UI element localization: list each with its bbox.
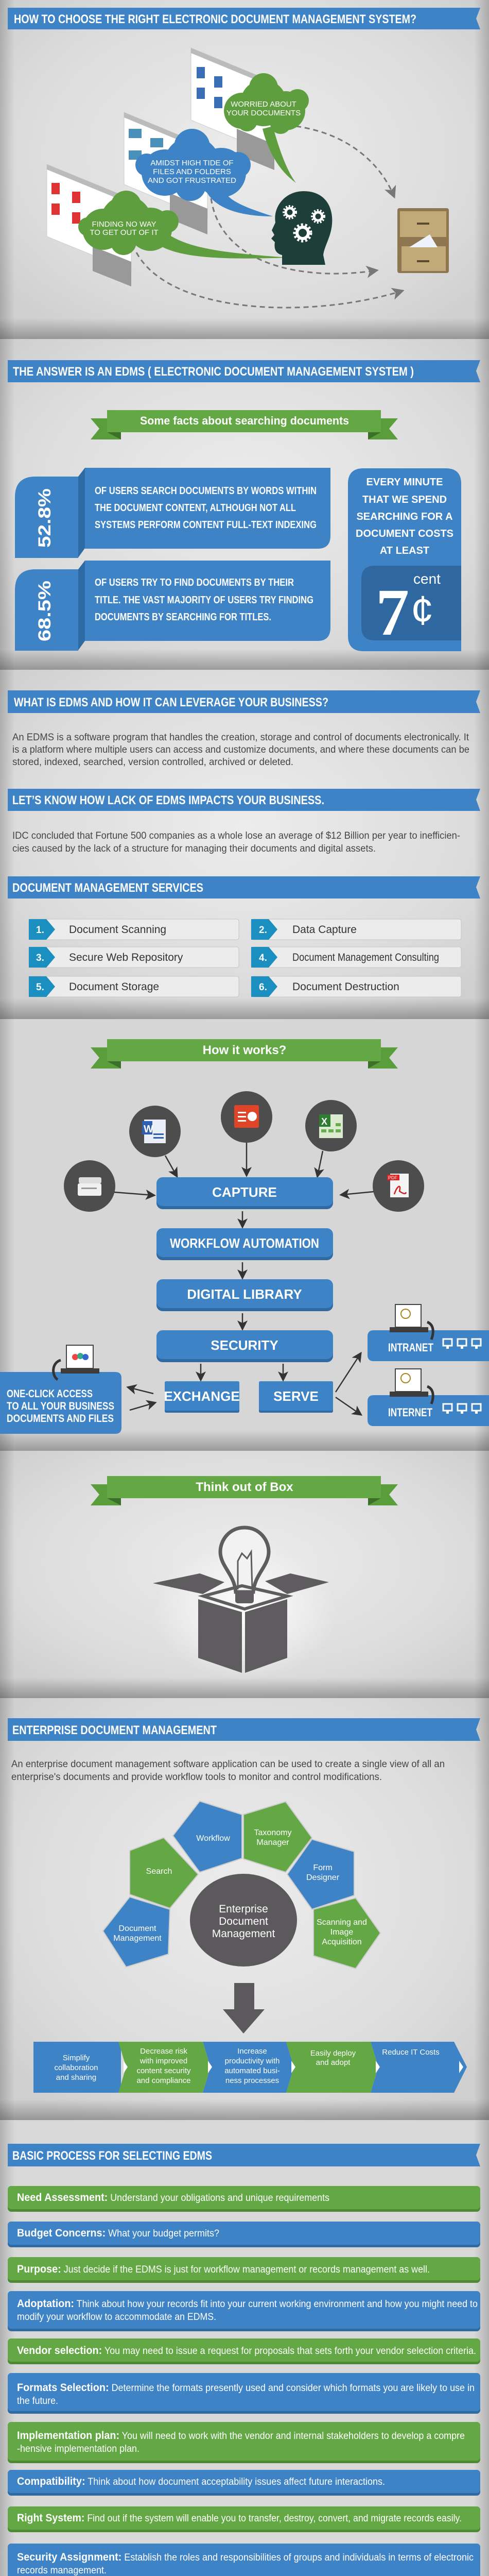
box: serve: SERVE — [273, 1388, 319, 1404]
process rows: Right System: Find out if the system will enable you to transfer, destroy, convert, and migrate records easily. — [17, 2512, 462, 2524]
cloud: worried — [224, 73, 309, 183]
ribbon: some facts — [91, 410, 398, 439]
box: one-click access: ONE-CLICK ACCESS — [7, 1388, 93, 1400]
icon: bulb in box — [152, 1528, 337, 1680]
dashed arrows to cabinet — [136, 126, 401, 308]
box: digital library — [156, 1279, 333, 1311]
diagram: EDM pentagons: Designer — [306, 1873, 340, 1882]
banner: lack of edms — [8, 789, 480, 811]
stat: 7 cent: THAT WE SPEND — [362, 494, 447, 505]
box: exchange — [164, 1381, 240, 1413]
text: idc: IDC concluded that Fortune 500 companies as a whole lose an average of $12 Billion per year to inefficien- — [12, 831, 460, 841]
banner: what is edms: WHAT IS EDMS AND HOW IT CAN LEVERAGE YOUR BUSINESS? — [14, 696, 328, 709]
text: edms definition: stored, indexed, searched, version controlled, archived or deleted. — [12, 757, 293, 768]
cloud: finding: TO GET OUT OF IT — [90, 228, 159, 237]
services list: Data Capture — [292, 924, 357, 936]
process rows: Need Assessment: Understand your obligations and unique requirements — [17, 2192, 329, 2204]
services list: 5. — [36, 982, 44, 993]
diagram: EDM pentagons: Scanning and — [317, 1918, 367, 1927]
banner: enterprise document management: ENTERPRISE DOCUMENT MANAGEMENT — [12, 1723, 217, 1737]
stat: 68.5%: DOCUMENTS BY SEARCHING FOR TITLES. — [95, 612, 271, 623]
banner: services — [8, 876, 480, 899]
text: enterprise: An enterprise document management software application can be used to create a single view of all an — [11, 1759, 445, 1770]
services list: Document Management Consulting — [292, 952, 439, 963]
benefits bar: Increase — [237, 2047, 267, 2056]
ribbon: how it works: How it works? — [203, 1043, 286, 1057]
benefits bar: Easily deploy — [310, 2049, 356, 2058]
services list: 1. — [36, 925, 44, 936]
cloud: amidst — [135, 129, 273, 216]
diagram: EDM pentagons: Enterprise — [219, 1903, 268, 1915]
box: one-click access: DOCUMENTS AND FILES — [7, 1413, 114, 1425]
process rows: Formats Selection: Determine the formats presently used and consider which formats you are likely to use in — [17, 2382, 475, 2394]
services list: 3. — [36, 953, 44, 963]
cloud: finding — [78, 191, 288, 259]
icon circles: sources: PDF — [388, 1175, 398, 1180]
box: capture: CAPTURE — [212, 1184, 277, 1200]
benefits bar: Simplify — [63, 2054, 90, 2062]
cloud: finding: FINDING NO WAY — [92, 220, 156, 229]
benefits bar: content security — [136, 2066, 191, 2075]
process rows: Security Assignment: Establish the roles and responsibilities of groups and individuals in terms of electronic — [17, 2551, 474, 2563]
banner: basic process — [8, 2144, 480, 2166]
banner: the answer: THE ANSWER IS AN EDMS ( ELECTRONIC DOCUMENT MANAGEMENT SYSTEM ) — [13, 365, 414, 379]
diagram: EDM pentagons: Management — [113, 1934, 162, 1943]
browser windows — [47, 48, 274, 286]
stat: 7 cent: SEARCHING FOR A — [356, 511, 453, 522]
services list: Document Storage — [69, 981, 159, 993]
process rows: Implementation plan: You will need to work with the vendor and internal stakeholders to develop a compre — [17, 2430, 465, 2442]
box: workflow automation: WORKFLOW AUTOMATION — [170, 1235, 319, 1251]
process rows: -hensive implementation plan. — [17, 2444, 139, 2454]
text: enterprise — [11, 1759, 445, 1783]
icon circles: sources: W — [144, 1124, 153, 1135]
box: internet: INTERNET — [388, 1406, 432, 1419]
services list: 4. — [259, 953, 267, 963]
diagram: EDM pentagons: Document — [219, 1916, 268, 1927]
stat: 52.8%: 52.8% — [35, 488, 55, 548]
icon: laptop one-click — [54, 1345, 99, 1380]
icon circles: sources — [64, 1091, 424, 1212]
box: one-click access: TO ALL YOUR BUSINESS — [7, 1400, 114, 1412]
icon: head with gears — [271, 191, 332, 265]
diagram: EDM pentagons: Manager — [256, 1838, 289, 1847]
stat: 52.8%: THE DOCUMENT CONTENT, ALTHOUGH NOT ALL — [95, 502, 296, 514]
services list: 2. — [259, 925, 267, 936]
benefits bar: automated busi- — [224, 2066, 280, 2075]
box: security — [156, 1330, 333, 1362]
stat: 7 cent: EVERY MINUTE — [366, 477, 443, 488]
diagram: EDM pentagons: Document — [119, 1924, 156, 1933]
stat: 68.5%: 68.5% — [35, 581, 55, 641]
icon: filing cabinet — [397, 208, 449, 273]
stat: 7 cent — [348, 468, 461, 651]
benefits bar: and compliance — [136, 2076, 191, 2085]
icon circles: sources: X — [321, 1116, 327, 1127]
text: edms definition: An EDMS is a software program that handles the creation, storage and control of documents electronically. It — [12, 732, 469, 743]
services list: Document Scanning — [69, 924, 166, 936]
benefits bar: with improved — [139, 2057, 187, 2065]
services list: Document Destruction — [292, 981, 399, 993]
banner: how to choose — [8, 8, 480, 29]
cloud: amidst: AMIDST HIGH TIDE OF — [150, 159, 234, 167]
benefits bar — [33, 2042, 467, 2093]
icon: laptop internet — [390, 1369, 433, 1404]
process rows: Budget Concerns: What your budget permits? — [17, 2227, 219, 2239]
benefits bar: ness processes — [225, 2076, 279, 2085]
box: intranet — [368, 1330, 489, 1361]
diagram: EDM pentagons: Workflow — [196, 1834, 230, 1843]
benefits bar: and adopt — [316, 2058, 351, 2067]
process rows: records management. — [17, 2565, 107, 2576]
box: capture — [156, 1177, 333, 1209]
benefits bar: productivity with — [225, 2057, 280, 2065]
diagram: EDM pentagons: Form — [313, 1863, 333, 1872]
cloud: amidst: FILES AND FOLDERS — [153, 167, 231, 176]
text: edms definition: is a platform where multiple users can access and customize documents, and where these documents can be — [12, 744, 469, 755]
stat: 68.5% — [15, 561, 330, 651]
banner: enterprise document management — [8, 1718, 480, 1741]
process rows: Compatibility: Think about how document acceptability issues affect future interactions. — [17, 2476, 385, 2487]
process rows: Adoptation: Think about how your records fit into your current working environment and how you might need to — [17, 2298, 478, 2310]
text: edms definition — [12, 732, 469, 768]
text: enterprise: enterprise's documents and provide workflow tools to monitor and control modifications. — [11, 1772, 382, 1783]
box: exchange: EXCHANGE — [164, 1388, 240, 1404]
diagram: EDM pentagons: Management — [212, 1928, 275, 1940]
box: serve — [259, 1381, 333, 1413]
box: one-click access — [0, 1372, 121, 1434]
diagram: EDM pentagons — [103, 1801, 380, 1969]
box: digital library: DIGITAL LIBRARY — [187, 1286, 302, 1302]
ribbon: some facts: Some facts about searching documents — [140, 414, 349, 427]
box: workflow automation — [156, 1228, 333, 1260]
banner: lack of edms: LET’S KNOW HOW LACK OF EDMS IMPACTS YOUR BUSINESS. — [12, 793, 324, 807]
stat: 52.8%: SYSTEMS PERFORM CONTENT FULL-TEXT INDEXING — [95, 519, 317, 531]
stat: 7 cent: 7 — [376, 575, 409, 650]
cloud: worried: WORRIED ABOUT — [231, 100, 296, 109]
diagram: EDM pentagons: Taxonomy — [254, 1828, 291, 1837]
box: security: SECURITY — [211, 1337, 278, 1353]
stat: 68.5%: TITLE. THE VAST MAJORITY OF USERS TRY FINDING — [95, 595, 313, 606]
box: internet — [368, 1395, 489, 1426]
stat: 7 cent: DOCUMENT COSTS — [356, 528, 453, 539]
benefits bar: Decrease risk — [140, 2047, 187, 2056]
arrows: sources to capture — [114, 1143, 374, 1414]
process rows: Purpose: Just decide if the EDMS is just for workflow management or records management as well. — [17, 2263, 430, 2275]
stat: 52.8%: OF USERS SEARCH DOCUMENTS BY WORDS WITHIN — [95, 485, 317, 497]
banner: the answer — [8, 360, 480, 382]
process rows — [8, 2186, 480, 2576]
benefits bar: collaboration — [54, 2063, 98, 2072]
ribbon: how it works — [91, 1039, 398, 1069]
diagram: EDM pentagons: Acquisition — [322, 1938, 362, 1946]
stat: 68.5%: OF USERS TRY TO FIND DOCUMENTS BY THEIR — [95, 577, 294, 588]
process rows: Vendor selection: You may need to issue a request for proposals that sets forth your vendor selection criteria. — [17, 2345, 476, 2357]
banner: what is edms — [8, 690, 480, 713]
stat: 52.8% — [15, 468, 330, 558]
icon: laptop intranet — [390, 1304, 433, 1340]
cloud: worried: YOUR DOCUMENTS — [226, 109, 301, 117]
services list: 6. — [259, 982, 267, 993]
ribbon: think out of box: Think out of Box — [196, 1480, 293, 1494]
diagram: EDM pentagons: Image — [330, 1928, 353, 1937]
services list — [29, 919, 461, 997]
ribbon: think out of box — [91, 1476, 398, 1505]
process rows: modify your workflow to accommodate an EDMS. — [17, 2312, 216, 2323]
services list: Secure Web Repository — [69, 952, 183, 963]
arrow: down — [223, 1983, 265, 2033]
stat: 7 cent: ¢ — [411, 587, 433, 633]
box: intranet: INTRANET — [388, 1341, 433, 1354]
banner: services: DOCUMENT MANAGEMENT SERVICES — [12, 881, 203, 895]
diagram: EDM pentagons: Search — [146, 1867, 172, 1876]
text: idc: cies caused by the lack of a structure for managing their documents and digital assets. — [12, 843, 376, 854]
text: idc — [12, 831, 460, 854]
banner: basic process: BASIC PROCESS FOR SELECTING EDMS — [12, 2149, 212, 2163]
cloud: amidst: AND GOT FRUSTRATED — [148, 176, 236, 185]
benefits bar: and sharing — [56, 2073, 96, 2082]
benefits bar: Reduce IT Costs — [382, 2048, 440, 2057]
process rows: the future. — [17, 2396, 58, 2406]
stat: 7 cent: cent — [413, 571, 441, 587]
stat: 7 cent: AT LEAST — [380, 545, 429, 556]
